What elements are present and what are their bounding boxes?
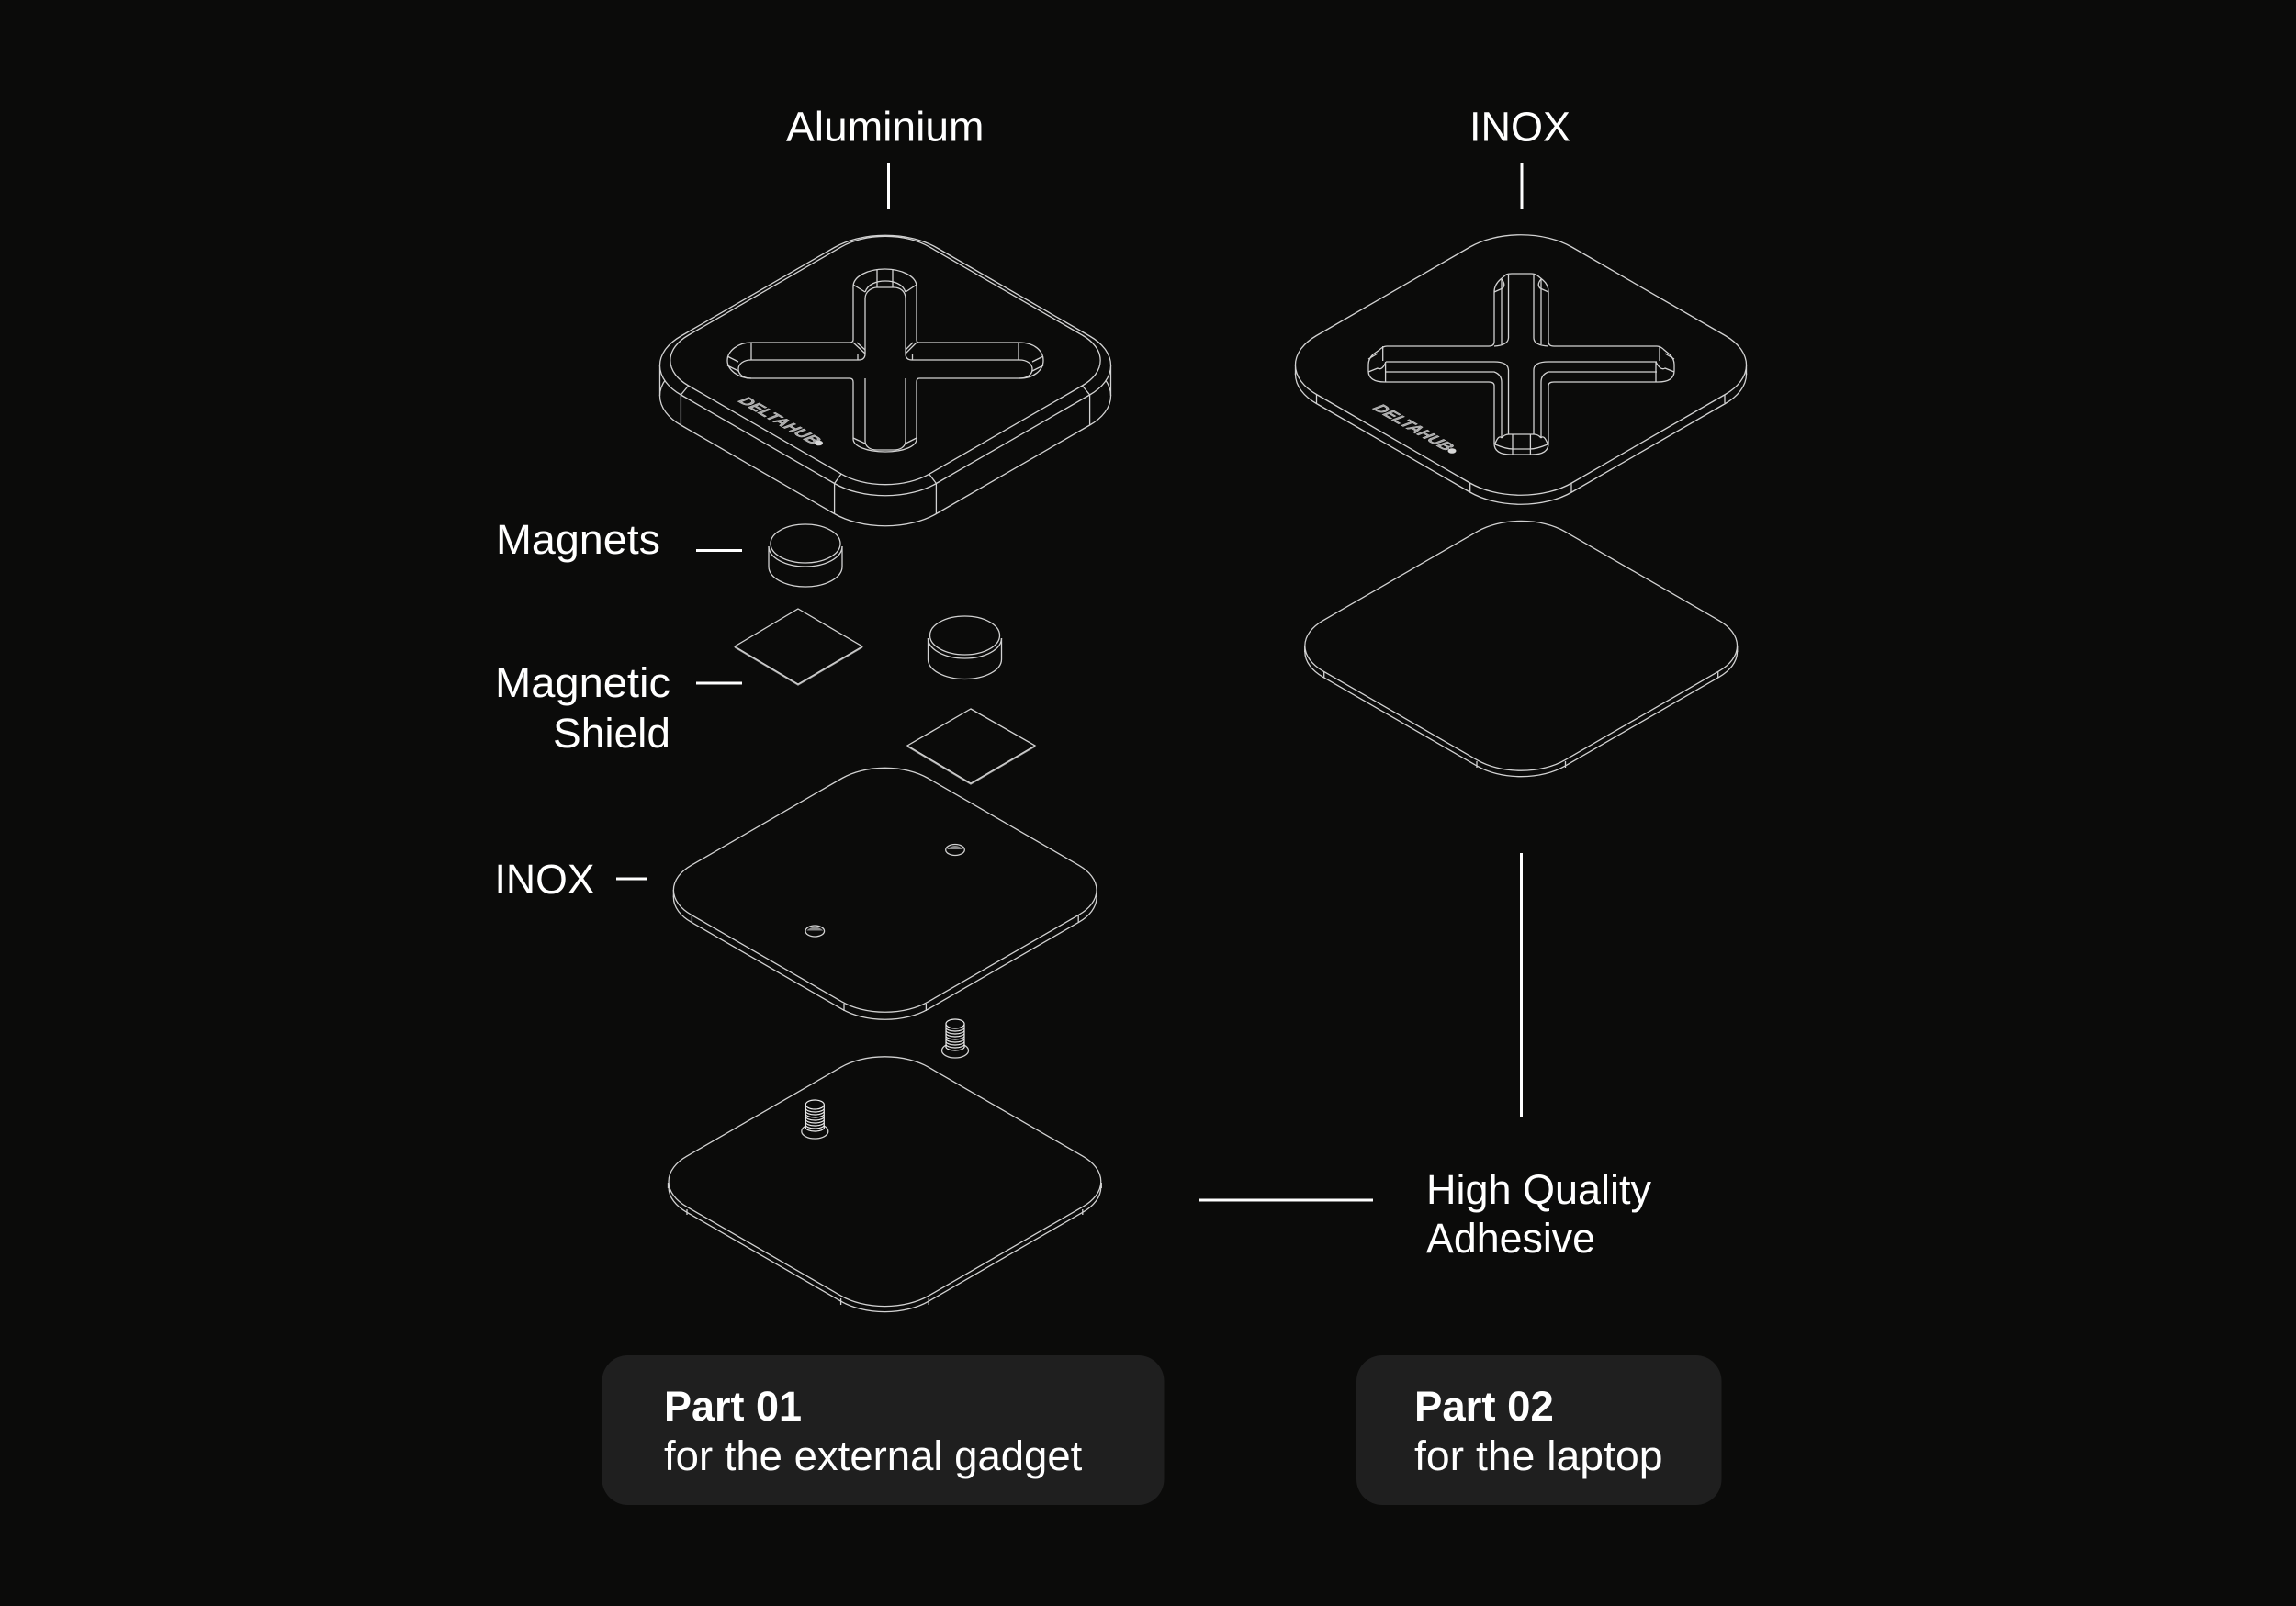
label: INOX left: INOX [494,856,595,903]
card: Part 02 [1356,1355,1721,1505]
raised cross [1368,274,1674,455]
label: Magnetic Shield: Magnetic [495,659,670,706]
leader: Magnets [696,549,742,552]
label: Magnets: Magnets [496,516,660,563]
logo: DELTAHUB: DELTAHUB [1369,401,1458,454]
label: High Quality Adhesive: Adhesive [1426,1215,1595,1262]
screw 1 [942,1019,968,1058]
label: INOX top right: INOX [1469,103,1570,151]
part: adhesive pad left [643,1042,1127,1327]
part: adhesive pad right [1279,506,1762,792]
hole 1 [946,845,964,856]
magnetic shield 2 [907,709,1035,784]
card: Part 02: for the laptop [1414,1432,1662,1479]
part: aluminium plate [630,219,1141,544]
part: INOX plate with holes [648,753,1121,1034]
card: Part 01: Part 01 [664,1383,802,1430]
label: Magnetic Shield: Shield [553,710,670,757]
label: High Quality Adhesive: High Quality [1426,1166,1651,1213]
card: Part 01 [602,1355,1165,1505]
leader: adhesive vertical [1520,853,1523,1117]
part: INOX plate with cross [1266,218,1776,522]
leader: Aluminium [887,163,890,209]
magnetic shield 1 [735,609,862,685]
card: Part 01: for the external gadget [664,1432,1083,1479]
leader: adhesive horizontal [1199,1199,1373,1201]
hole 2 [805,926,825,937]
label: High Quality Adhesive [1426,1166,1651,1262]
logo: DELTAHUB: DELTAHUB [735,394,825,447]
card: Part 02: Part 02 [1414,1383,1554,1430]
screw 2 [802,1100,828,1139]
magnet 1 [769,524,842,587]
leader: INOX left [616,878,647,880]
leader: Magnetic Shield [696,681,742,685]
label: Magnetic Shield [495,659,670,757]
magnet 2 [928,616,1001,679]
recessed cross [727,269,1043,452]
leader: INOX top right [1521,163,1523,209]
label: Aluminium: Aluminium [786,103,985,151]
